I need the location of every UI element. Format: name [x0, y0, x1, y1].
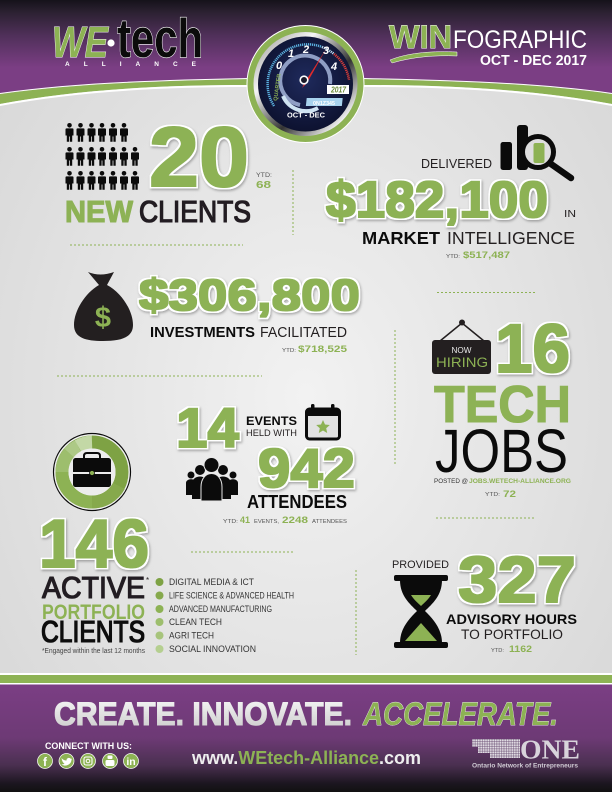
- panel: market intelligence: [326, 125, 576, 261]
- panel: investments facilitated: YTD:: [282, 348, 297, 354]
- gauge: quarter dial: 0: [276, 60, 283, 72]
- panel: active portfolio clients: ACTIVE: [42, 570, 145, 605]
- social links: in: [126, 756, 136, 768]
- panel: new clients: NEW: [65, 194, 134, 229]
- gauge: quarter dial: 2: [302, 44, 309, 56]
- panel: investments facilitated: FACILITATED: [260, 324, 347, 341]
- panel: events and attendees: YTD:: [223, 519, 239, 525]
- panel: investments facilitated: $718,525: [298, 344, 348, 355]
- panel: market intelligence: $517,487: [463, 250, 510, 261]
- icon: calendar: [306, 404, 340, 439]
- icon: hourglass: [394, 575, 448, 648]
- tagline: [54, 696, 558, 732]
- social links: f: [43, 755, 48, 769]
- panel: events and attendees: 14: [176, 396, 239, 459]
- panel: investments facilitated: $306,800: [139, 271, 360, 320]
- icon: money bag: $: [95, 302, 111, 334]
- panel: events and attendees: HELD WITH: [246, 428, 297, 439]
- panel: new clients: 20: [149, 110, 249, 204]
- tagline: ACCELERATE.: [362, 696, 558, 732]
- panel: new clients: YTD:: [256, 173, 272, 179]
- panel: active portfolio clients: CLIENTS: [41, 614, 145, 649]
- panel: advisory hours: ADVISORY HOURS: [446, 611, 577, 627]
- footer band: [0, 673, 612, 792]
- panel: events and attendees: 942: [258, 437, 355, 499]
- logo: Ontario Network of Entrepreneurs: ONE: [520, 734, 580, 764]
- panel: market intelligence: INTELLIGENCE: [447, 228, 575, 248]
- gauge: quarter dial: 4: [330, 61, 337, 73]
- panel: tech jobs: JOBS: [435, 417, 568, 485]
- panel: events and attendees: 2248: [282, 515, 308, 526]
- panel: market intelligence: DELIVERED: [421, 157, 492, 171]
- panel: advisory hours: TO PORTFOLIO: [461, 626, 563, 642]
- panel: events and attendees: 41: [240, 515, 251, 526]
- panel: tech jobs: 72: [503, 489, 516, 500]
- panel: advisory hours: [392, 543, 577, 655]
- header band: [0, 0, 612, 106]
- logo: Ontario Network of Entrepreneurs: [472, 734, 580, 770]
- panel: active portfolio clients: [39, 434, 294, 655]
- gauge: quarter dial: QUARTER: [273, 73, 283, 101]
- legend: sectors: SOCIAL INNOVATION: [169, 644, 256, 654]
- panel: advisory hours: 1162: [509, 644, 532, 655]
- panel: active portfolio clients: *: [146, 576, 149, 585]
- panel: active portfolio clients: PORTFOLIO: [42, 601, 145, 624]
- panel: events and attendees: EVENTS: [246, 414, 297, 428]
- social links: CONNECT WITH US:: [45, 741, 132, 752]
- panel: tech jobs: 16: [495, 310, 570, 387]
- icon: bars and magnifier: [500, 125, 571, 178]
- icon: now hiring sign: [432, 320, 491, 374]
- panel: advisory hours: YTD:: [491, 648, 504, 654]
- legend: sectors: ADVANCED MANUFACTURING: [169, 604, 272, 614]
- panel: tech jobs: JOBS.WETECH-ALLIANCE.ORG: [469, 478, 571, 485]
- panel: investments facilitated: INVESTMENTS: [150, 324, 255, 341]
- panel: tech jobs: POSTED @: [434, 479, 468, 485]
- logo: WE-tech Alliance: [52, 7, 203, 69]
- panel: advisory hours: 327: [458, 543, 576, 616]
- panel: new clients: 68: [256, 179, 271, 191]
- panel: advisory hours: PROVIDED: [392, 559, 449, 571]
- title: WINfographic: WIN: [389, 19, 452, 55]
- legend: sectors: [156, 577, 294, 654]
- logo: WE-tech Alliance: ALLIANCE: [65, 61, 197, 68]
- tagline: CREATE. INNOVATE.: [54, 696, 352, 732]
- icon: now hiring sign: HIRING: [436, 355, 488, 370]
- panel: tech jobs: YTD:: [485, 492, 501, 498]
- icon: group of people: [186, 458, 238, 501]
- gauge: quarter dial: 1: [288, 48, 294, 60]
- panel: tech jobs: TECH: [434, 376, 571, 434]
- legend: sectors: DIGITAL MEDIA & ICT: [169, 577, 254, 587]
- panel: investments facilitated: [74, 271, 360, 355]
- website url: www.WEtech-Alliance.com: [191, 748, 421, 768]
- panel: events and attendees: EVENTS,: [254, 519, 279, 525]
- legend: sectors: AGRI TECH: [169, 630, 214, 640]
- title: WINfographic: FOGRAPHIC: [453, 26, 587, 54]
- panel: events and attendees: [176, 396, 355, 526]
- gauge: quarter dial: OCT - DEC: [287, 110, 326, 120]
- legend: sectors: LIFE SCIENCE & ADVANCED HEALTH: [169, 590, 294, 600]
- title: WINfographic: OCT - DEC 2017: [480, 53, 587, 69]
- icon: now hiring sign: NOW: [452, 346, 472, 355]
- gauge: quarter dial: [247, 26, 364, 142]
- panel: active portfolio clients: 146: [39, 506, 149, 582]
- social links: [38, 741, 138, 769]
- logo: WE-tech Alliance: tech: [117, 7, 203, 69]
- icon: people grid: [66, 123, 139, 190]
- panel: market intelligence: YTD:: [446, 254, 461, 260]
- legend: sectors: CLEAN TECH: [169, 617, 222, 627]
- panel: events and attendees: ATTENDEES: [247, 492, 347, 512]
- title: WINfographic: [389, 19, 587, 69]
- gauge: quarter dial: 2017: [330, 86, 346, 94]
- icon: money bag: [74, 272, 133, 341]
- panel: tech jobs: [432, 310, 571, 500]
- logo: WE-tech Alliance: WE: [52, 18, 109, 67]
- panel: market intelligence: MARKET: [362, 228, 440, 248]
- gauge: quarter dial: 3: [323, 45, 329, 57]
- panel: events and attendees: ATTENDEES: [312, 519, 347, 525]
- panel: active portfolio clients: *Engaged within the last 12 months: [42, 648, 145, 655]
- panel: market intelligence: IN: [564, 208, 576, 220]
- chart: portfolio donut with briefcase: [54, 434, 130, 510]
- gauge: quarter dial: 0N1Z345: [313, 101, 335, 107]
- logo: Ontario Network of Entrepreneurs: Ontario Network of Entrepreneurs: [472, 764, 579, 770]
- panel: market intelligence: $182,100: [326, 171, 548, 228]
- panel: new clients: CLIENTS: [139, 194, 251, 229]
- panel: new clients: [65, 110, 272, 229]
